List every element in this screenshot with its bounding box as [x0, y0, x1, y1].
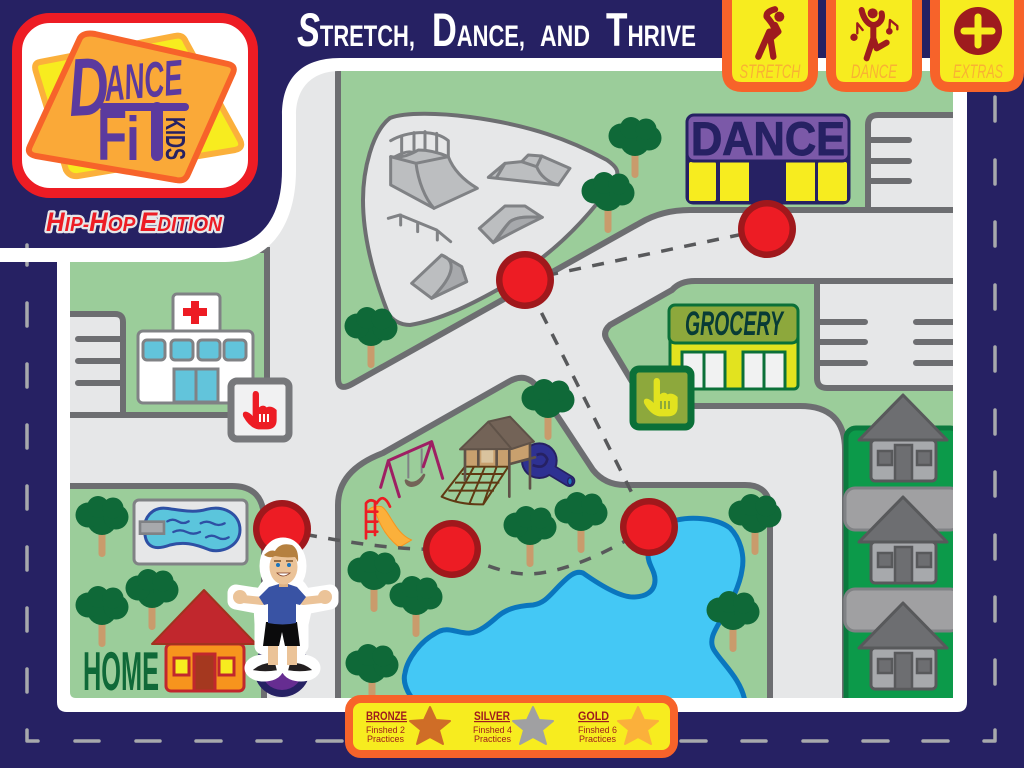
- button: extras: [935, 0, 1019, 87]
- button: hospital hand: [231, 381, 289, 439]
- legend: gold: [578, 707, 658, 744]
- map node: playground: [423, 520, 481, 578]
- legend: gold: Finshed 6: [578, 725, 617, 735]
- legend: bronze: Finshed 2: [366, 725, 405, 735]
- legend: bronze: [366, 707, 450, 744]
- legend: silver: SILVER: [474, 709, 510, 723]
- dashed route path: [310, 233, 739, 576]
- house 1: [859, 395, 947, 481]
- map node: skate park: [496, 251, 554, 309]
- neck and head: [264, 544, 298, 587]
- back plate: [35, 36, 241, 176]
- kicker ramp: [412, 255, 467, 298]
- swimming pool: [134, 500, 247, 564]
- title: THRIVE: [606, 3, 696, 56]
- white sticker outline: [236, 546, 330, 673]
- house: home: [152, 590, 256, 691]
- quarter pipe: [391, 132, 477, 208]
- hospital building: [138, 294, 253, 403]
- title: [297, 3, 696, 56]
- grocery store: GROCERY: [685, 305, 785, 343]
- panel: park block: [338, 378, 770, 710]
- logo: Dance Fit Kids: F: [97, 96, 127, 176]
- legend: gold: Practices: [579, 734, 616, 744]
- map node: lake: [620, 498, 678, 556]
- lake: [404, 518, 745, 702]
- legend: silver: Finshed 4: [473, 725, 512, 735]
- character: boy: [233, 544, 332, 673]
- dance studio building: DANCE: [691, 112, 845, 165]
- spine ramp: [488, 155, 570, 185]
- map node: dance: [738, 200, 796, 258]
- logo subtitle: HIP-HOP EDITION: [46, 207, 223, 237]
- title: DANCE,: [432, 3, 525, 56]
- logo: Dance Fit Kids: i: [126, 105, 140, 174]
- swing set: [381, 442, 443, 497]
- panel: home block: HOME: [83, 640, 159, 702]
- legend: silver: Practices: [474, 734, 511, 744]
- hands: [233, 590, 332, 604]
- button: dance: [831, 0, 917, 87]
- logo: Dance Fit Kids: ANCE: [101, 49, 186, 112]
- house 2: [859, 497, 947, 583]
- road dashes around the border: [27, 97, 995, 741]
- parking lot: [817, 281, 960, 388]
- grocery store: [669, 305, 798, 389]
- front plate: [29, 34, 234, 180]
- panel: home block: [60, 486, 264, 710]
- panel: achievement legend: [349, 699, 674, 754]
- legend: bronze: Practices: [367, 734, 404, 744]
- climbing net: [442, 467, 508, 504]
- grind rail: [388, 215, 451, 242]
- arms: [243, 599, 322, 601]
- fun box: [479, 206, 542, 243]
- legs: [268, 644, 297, 665]
- button: stretch: [727, 0, 813, 87]
- parking lot top right: [868, 115, 960, 210]
- dance studio building: [687, 112, 849, 203]
- legend: gold: GOLD: [578, 709, 609, 723]
- slide: [366, 498, 412, 547]
- logo: Dance Fit Kids: KIDS: [160, 117, 191, 160]
- clubhouse: [460, 417, 535, 497]
- panel: grocery block: [605, 281, 960, 710]
- button: dance: DANCE: [851, 62, 897, 83]
- legend: silver: [473, 707, 553, 744]
- icon: dancing figure: [850, 8, 897, 58]
- shoes: [253, 663, 312, 672]
- panel: houses street: [845, 395, 960, 708]
- map node: home: [256, 653, 308, 697]
- map node: pool: [253, 500, 311, 551]
- button: grocery hand: [633, 369, 691, 427]
- button: stretch: STRETCH: [740, 62, 801, 83]
- legend: bronze: BRONZE: [366, 709, 407, 723]
- logo: Dance Fit Kids: [17, 18, 253, 193]
- hospital parking: [70, 311, 126, 412]
- icon: stretching figure: [758, 9, 784, 57]
- shirt: [259, 584, 306, 624]
- tube slide: [522, 443, 572, 485]
- playground: [366, 417, 572, 547]
- panel: upper green block with skate park: [338, 60, 960, 387]
- skate park: [363, 114, 617, 325]
- trees: [76, 117, 782, 705]
- map: [60, 60, 960, 710]
- panel: hospital block: [60, 250, 267, 415]
- shorts: [263, 622, 300, 646]
- logo: Dance Fit Kids: D: [66, 41, 111, 134]
- title: AND: [540, 20, 590, 53]
- title: STRETCH,: [297, 3, 415, 56]
- house 3: [859, 603, 947, 689]
- icon: plus: [954, 7, 1002, 55]
